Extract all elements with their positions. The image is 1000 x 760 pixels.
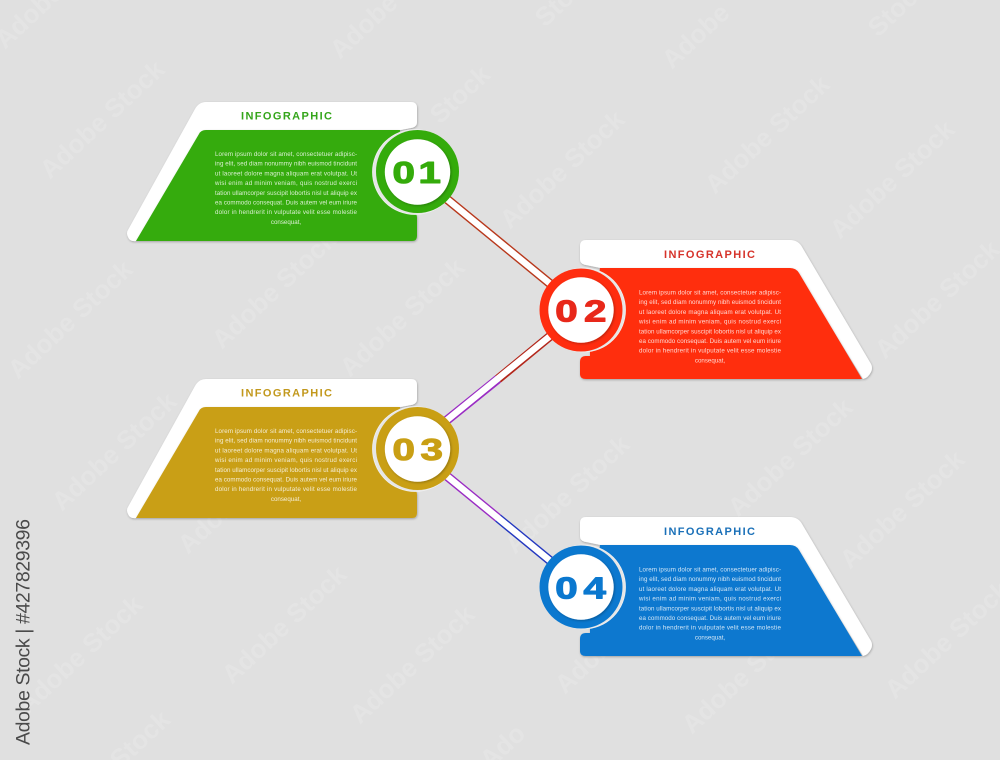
watermark pattern: Adobe Stock bbox=[722, 392, 859, 522]
white backing: step 01 bbox=[127, 102, 417, 241]
number badge: 02: 0 bbox=[555, 293, 578, 328]
body text: step 02: ea commodo consequat. Duis autem vel eum iriure bbox=[639, 338, 782, 345]
body text: step 04: wisi enim ad minim veniam, quis nostrud exerci bbox=[638, 596, 781, 603]
body text: step 03: wisi enim ad minim veniam, quis nostrud exerci bbox=[214, 457, 357, 464]
body text: step 01: ut laoreet dolore magna aliquam erat volutpat. Ut bbox=[215, 170, 357, 177]
watermark pattern: Adobe Stock bbox=[206, 224, 343, 354]
heading: step 02: INFOGRAPHIC bbox=[664, 249, 755, 261]
heading: step 03: INFOGRAPHIC bbox=[241, 388, 332, 400]
body text: step 02: Lorem ipsum dolor sit amet, consectetuer adipisc- bbox=[639, 290, 781, 296]
number badge: 02 bbox=[540, 268, 626, 352]
number badge: 01: 1 bbox=[418, 155, 441, 190]
watermark pattern: Adobe Stock bbox=[549, 569, 686, 699]
body text: step 03: Lorem ipsum dolor sit amet, consectetuer adipisc- bbox=[215, 428, 357, 435]
body text: step 01: tation ullamcorper suscipit lobortis nisl ut aliquip ex bbox=[215, 190, 358, 197]
panel: step 01 bbox=[127, 102, 459, 241]
body text: step 04: consequat, bbox=[695, 634, 725, 641]
body text: step 02: ing elit, sed diam nonummy nibh euismod tincidunt bbox=[639, 299, 781, 306]
number badge: 04: 4 bbox=[584, 570, 606, 605]
watermark pattern: Adobe Stock bbox=[12, 589, 149, 719]
heading: step 04: INFOGRAPHIC bbox=[664, 526, 755, 538]
body text: step 03 bbox=[214, 428, 358, 503]
number badge: 03 bbox=[372, 406, 459, 492]
watermark pattern: Adobe Stock bbox=[699, 69, 836, 199]
panel: step 02 bbox=[540, 240, 872, 379]
number badge: 03: 0 bbox=[392, 432, 415, 467]
colour block: step 02 bbox=[580, 268, 862, 379]
watermark pattern: Adobe Stock bbox=[494, 104, 631, 234]
body text: step 01: ing elit, sed diam nonummy nibh euismod tincidunt bbox=[215, 161, 357, 168]
body text: step 01: Lorem ipsum dolor sit amet, consectetuer adipisc- bbox=[215, 151, 357, 158]
panel: step 04 bbox=[540, 517, 872, 656]
watermark pattern: Adobe Stock bbox=[162, 96, 299, 226]
panel: step 03 bbox=[127, 379, 459, 518]
number badge: 04 bbox=[540, 545, 626, 629]
number badge: 01 bbox=[372, 130, 459, 214]
body text: step 03: ea commodo consequat. Duis autem vel eum iriure bbox=[215, 476, 358, 484]
body text: step 02: dolor in hendrerit in vulputate velit esse molestie bbox=[639, 348, 782, 355]
body text: step 02 bbox=[638, 290, 782, 364]
watermark pattern: Adobe Stock bbox=[676, 609, 813, 739]
body text: step 02: wisi enim ad minim veniam, quis nostrud exerci bbox=[638, 319, 781, 326]
watermark pattern: Adobe Stock bbox=[824, 114, 961, 244]
body text: step 04: Lorem ipsum dolor sit amet, consectetuer adipisc- bbox=[639, 566, 781, 574]
white backing: step 03 bbox=[127, 379, 417, 518]
colour block: step 03 bbox=[136, 407, 417, 518]
watermark pattern: Adobe Stock bbox=[216, 559, 353, 689]
body text: step 02: tation ullamcorper suscipit lobortis nisl ut aliquip ex bbox=[639, 328, 782, 335]
body text: step 04: dolor in hendrerit in vulputate velit esse molestie bbox=[639, 625, 782, 632]
number badge: 02: 2 bbox=[584, 293, 606, 328]
connector: 03 to 04 bbox=[440, 470, 560, 569]
body text: step 01: ea commodo consequat. Duis autem vel eum iriure bbox=[215, 200, 358, 206]
watermark pattern: Adobe Stock bbox=[499, 429, 636, 559]
body text: step 03: ut laoreet dolore magna aliquam erat volutpat. Ut bbox=[215, 447, 357, 454]
body text: step 04: tation ullamcorper suscipit lobortis nisl ut aliquip ex bbox=[639, 605, 782, 612]
white backing: step 02 bbox=[580, 240, 872, 379]
body text: step 01: dolor in hendrerit in vulputate velit esse molestie bbox=[215, 209, 358, 216]
body text: step 04: ut laoreet dolore magna aliquam erat volutpat. Ut bbox=[639, 586, 781, 593]
connector: 01 to 02 bbox=[440, 193, 560, 292]
watermark pattern: Adobe Stock bbox=[344, 599, 481, 729]
number badge: 03: 3 bbox=[420, 432, 443, 467]
body text: step 02: ut laoreet dolore magna aliquam erat volutpat. Ut bbox=[639, 309, 781, 316]
body text: step 04: ing elit, sed diam nonummy nibh euismod tincidunt bbox=[639, 576, 781, 583]
colour block: step 04 bbox=[580, 545, 862, 656]
number badge: 01: 0 bbox=[392, 155, 415, 190]
body text: step 04: ea commodo consequat. Duis autem vel eum iriure bbox=[639, 615, 782, 622]
colour block: step 01 bbox=[136, 130, 417, 241]
body text: step 03: ing elit, sed diam nonummy nibh euismod tincidunt bbox=[215, 438, 357, 445]
watermark pattern: Adobe Stock bbox=[46, 386, 183, 516]
body text: step 01 bbox=[214, 151, 358, 226]
heading: step 01: INFOGRAPHIC bbox=[241, 111, 332, 123]
number badge: 04: 0 bbox=[555, 570, 578, 605]
connector: 02 to 03 bbox=[436, 328, 560, 429]
watermark pattern: Adobe Stock bbox=[34, 54, 171, 184]
watermark pattern: Stock bbox=[424, 59, 496, 129]
stock id caption: Adobe Stock | #427829396 bbox=[12, 519, 34, 745]
body text: step 02: consequat, bbox=[695, 357, 725, 364]
watermark pattern: Adobe bbox=[172, 482, 251, 559]
body text: step 01: consequat, bbox=[271, 219, 301, 226]
watermark pattern: Adobe Stock bbox=[334, 252, 471, 382]
watermark pattern: Adobe Stock bbox=[2, 254, 139, 384]
watermark pattern: Adobe Stock bbox=[834, 444, 971, 574]
body text: step 03: tation ullamcorper suscipit lobortis nisl ut aliquip ex bbox=[215, 467, 358, 474]
body text: step 03: dolor in hendrerit in vulputate velit esse molestie bbox=[215, 486, 358, 493]
body text: step 03: consequat, bbox=[271, 496, 301, 503]
white backing: step 04 bbox=[580, 517, 872, 656]
body text: step 01: wisi enim ad minim veniam, quis nostrud exerci bbox=[214, 180, 357, 187]
body text: step 04 bbox=[638, 566, 782, 641]
